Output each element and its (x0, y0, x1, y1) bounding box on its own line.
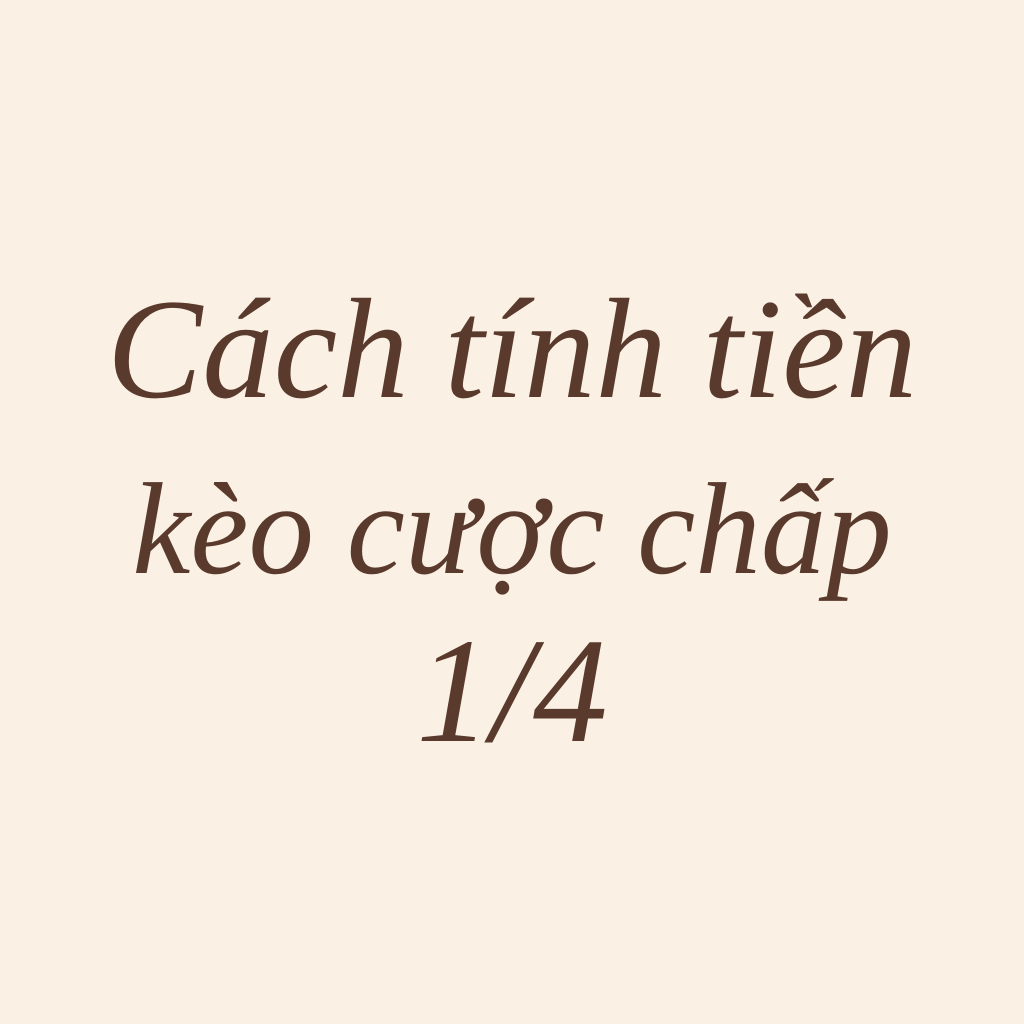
title line 2: kèo cược chấp (132, 457, 892, 602)
title line 3: 1/4 (416, 608, 608, 774)
title line 1: Cách tính tiền (107, 270, 917, 428)
